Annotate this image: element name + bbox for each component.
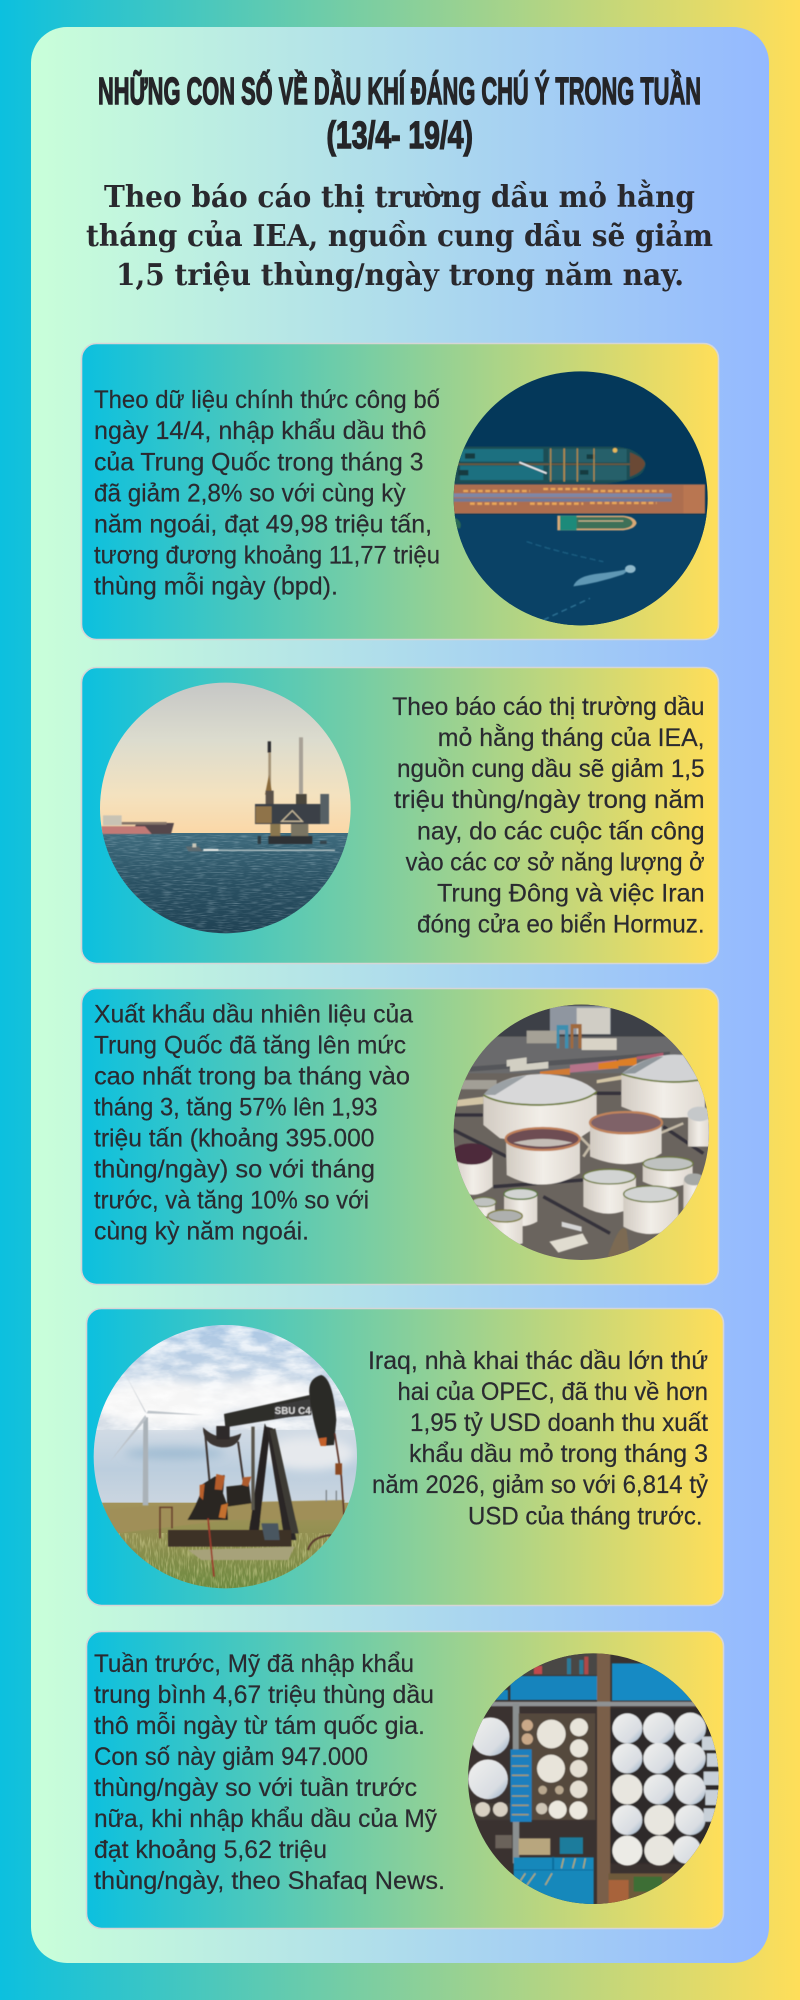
card text: thùng/ngày, theo Shafaq News. xyxy=(94,1867,445,1895)
card text: tương đương khoảng 11,77 triệu xyxy=(94,542,440,570)
card background xyxy=(86,1308,724,1606)
large tank xyxy=(483,1095,597,1140)
center open tank xyxy=(506,1140,580,1185)
card text xyxy=(94,386,440,600)
card text xyxy=(392,693,705,938)
subtitle: tháng của IEA, nguồn cung dầu sẽ giảm xyxy=(86,219,713,254)
card text: năm 2026, giảm so với 6,814 tỷ xyxy=(372,1471,708,1499)
card text: USD của tháng trước. xyxy=(468,1502,702,1530)
card text: thùng/ngày so với tuần trước xyxy=(94,1774,417,1802)
panel: Iraq oil revenue xyxy=(86,1308,724,1606)
right open tank xyxy=(590,1123,662,1164)
card text: mỏ hằng tháng của IEA, xyxy=(438,723,705,752)
card text: Theo dữ liệu chính thức công bố xyxy=(94,386,440,414)
card text: thô mỗi ngày từ tám quốc gia. xyxy=(94,1711,425,1740)
card text: đã giảm 2,8% so với cùng kỳ xyxy=(94,480,406,508)
card text: tháng 3, tăng 57% lên 1,93 xyxy=(94,1094,378,1122)
photo: offshore oil rig xyxy=(100,682,351,934)
photo: tankers at a pier xyxy=(450,365,717,632)
photo: pumpjack and wind turbine: SBU C4 xyxy=(275,1406,311,1417)
card text: hai của OPEC, đã thu về hơn xyxy=(398,1378,708,1406)
panel: China fuel exports xyxy=(82,988,718,1284)
card background xyxy=(82,344,718,640)
left open tank xyxy=(453,1155,493,1195)
card background xyxy=(86,1632,724,1928)
card text: nữa, khi nhập khẩu dầu của Mỹ xyxy=(94,1805,437,1833)
photo: pumpjack and wind turbine xyxy=(88,1320,365,1590)
card text: trước, và tăng 10% so với xyxy=(94,1186,369,1214)
card text: thùng mỗi ngày (bpd). xyxy=(94,572,338,600)
card text: Con số này giảm 947.000 xyxy=(94,1743,368,1771)
card text: Tuần trước, Mỹ đã nhập khẩu xyxy=(94,1650,414,1678)
card text: ngày 14/4, nhập khẩu dầu thô xyxy=(94,417,427,445)
card text: năm ngoái, đạt 49,98 triệu tấn, xyxy=(94,510,432,538)
card text: nguồn cung dầu sẽ giảm 1,5 xyxy=(397,755,705,783)
card text: trung bình 4,67 triệu thùng dầu xyxy=(94,1681,434,1709)
card text: cao nhất trong ba tháng vào xyxy=(94,1062,410,1090)
card text: nay, do các cuộc tấn công xyxy=(417,818,705,846)
card text: Xuất khẩu dầu nhiên liệu của xyxy=(94,1000,413,1028)
card text: Trung Quốc đã tăng lên mức xyxy=(94,1032,406,1060)
card text: đạt khoảng 5,62 triệu xyxy=(94,1836,327,1864)
title: (13/4- 19/4) xyxy=(326,115,473,157)
card text: 1,95 tỷ USD doanh thu xuất xyxy=(410,1409,708,1437)
card text: đóng cửa eo biển Hormuz. xyxy=(417,910,705,938)
card text: Trung Đông và việc Iran xyxy=(437,880,705,908)
back right tank xyxy=(621,1074,705,1118)
title xyxy=(98,68,701,157)
card background xyxy=(82,668,718,964)
card text xyxy=(94,1650,445,1895)
card text: triệu thùng/ngày trong năm xyxy=(394,786,705,814)
subtitle: 1,5 triệu thùng/ngày trong năm nay. xyxy=(116,258,684,293)
panel: China crude imports xyxy=(82,344,718,640)
card text: Theo báo cáo thị trường dầu xyxy=(392,693,705,721)
card text xyxy=(94,1000,413,1246)
panel: IEA supply report xyxy=(82,668,718,964)
card text: cùng kỳ năm ngoái. xyxy=(94,1218,309,1246)
card background xyxy=(82,988,718,1284)
card text: triệu tấn (khoảng 395.000 xyxy=(94,1124,374,1152)
card text: vào các cơ sở năng lượng ở xyxy=(406,848,705,876)
mid small tanks xyxy=(583,1177,636,1214)
photo: oil storage tanks xyxy=(450,1000,717,1267)
panel: US crude imports xyxy=(86,1632,725,1928)
card text: của Trung Quốc trong tháng 3 xyxy=(94,448,424,476)
photo: aerial view of silos xyxy=(462,1650,725,1913)
card text: khẩu dầu mỏ trong tháng 3 xyxy=(409,1440,708,1468)
card text xyxy=(368,1347,708,1530)
subtitle: Theo báo cáo thị trường dầu mỏ hằng xyxy=(104,179,695,215)
card text: Iraq, nhà khai thác dầu lớn thứ xyxy=(368,1347,708,1375)
subtitle xyxy=(86,179,713,293)
card text: thùng/ngày) so với tháng xyxy=(94,1156,375,1184)
